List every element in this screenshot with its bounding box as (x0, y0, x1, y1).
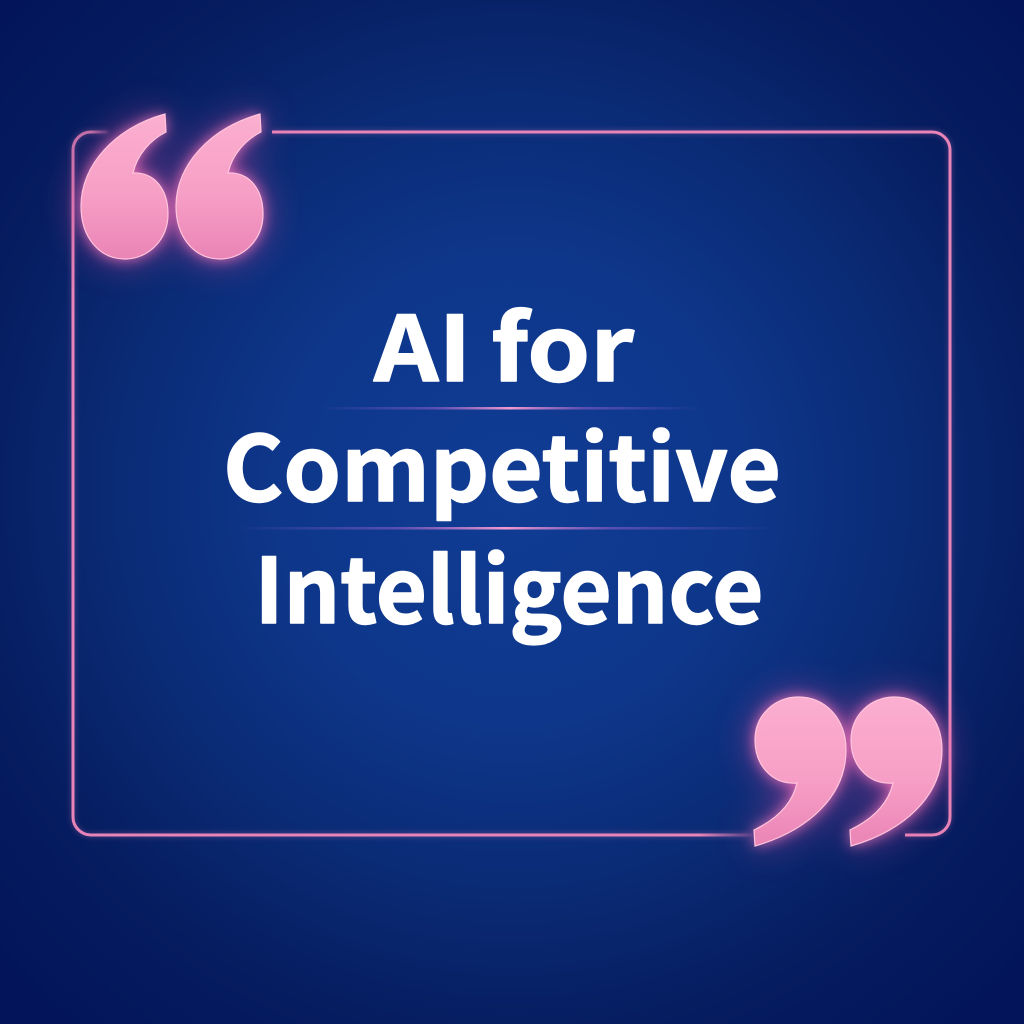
title (223, 277, 781, 649)
divider (235, 527, 775, 530)
icon: closing quotation mark (754, 697, 942, 846)
title: AI for (373, 277, 635, 407)
title: Intelligence (254, 519, 764, 649)
icon: opening quotation mark (81, 114, 263, 259)
frame (73, 132, 950, 835)
title: Competitive (223, 397, 781, 527)
divider (320, 407, 700, 410)
